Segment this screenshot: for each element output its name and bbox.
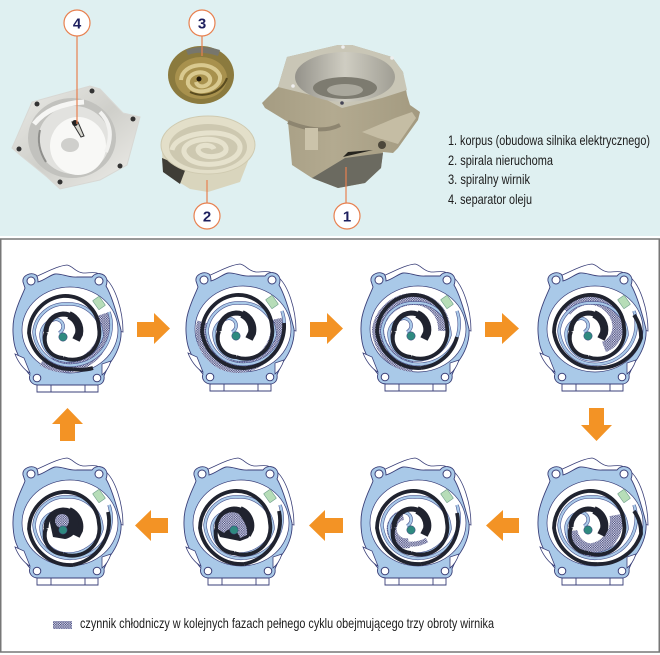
arrow: right 3	[485, 313, 519, 344]
compressor phase 5	[538, 458, 648, 585]
arrow: left 2	[309, 510, 343, 541]
callout: 2: 2	[203, 208, 211, 226]
legend: refrigerant swatch	[53, 621, 72, 629]
compressor phase 7	[184, 458, 294, 585]
arrow: up	[52, 408, 83, 441]
callout: 2	[194, 180, 220, 229]
callout: 3	[189, 10, 215, 56]
photo: spiral rotor	[168, 46, 234, 104]
compressor phase 1	[13, 265, 123, 392]
parts legend: 2. spirala nieruchoma	[448, 152, 553, 168]
compressor phase 6	[361, 458, 471, 585]
arrow: down	[581, 408, 612, 441]
parts legend: 4. separator oleju	[448, 191, 532, 207]
callout: 1: 1	[343, 208, 351, 226]
parts legend	[448, 132, 650, 207]
arrow: left 1	[486, 510, 519, 541]
compressor phase 4	[538, 264, 648, 391]
callout: 1	[334, 167, 360, 229]
arrow: left 3	[135, 510, 168, 541]
callout: 4: 4	[73, 16, 82, 32]
arrow: right 1	[137, 313, 170, 344]
callout: 4	[64, 10, 90, 124]
arrow: right 2	[310, 313, 343, 344]
photo: oil separator plate	[12, 86, 140, 189]
parts legend: 3. spiralny wirnik	[448, 171, 531, 187]
legend: refrigerant caption: czynnik chłodniczy w kolejnych fazach pełnego cyklu obejmującego trzy obroty wirnika	[80, 615, 494, 631]
callout: 3: 3	[198, 16, 206, 32]
top panel: components background	[0, 0, 660, 236]
photo: compressor housing	[262, 45, 420, 188]
compressor phase 3	[361, 264, 471, 391]
panel: compression cycle frame	[1, 239, 659, 652]
compressor phase 2	[186, 264, 296, 391]
compressor phase 8	[13, 458, 123, 585]
photo: fixed spiral	[161, 116, 255, 192]
